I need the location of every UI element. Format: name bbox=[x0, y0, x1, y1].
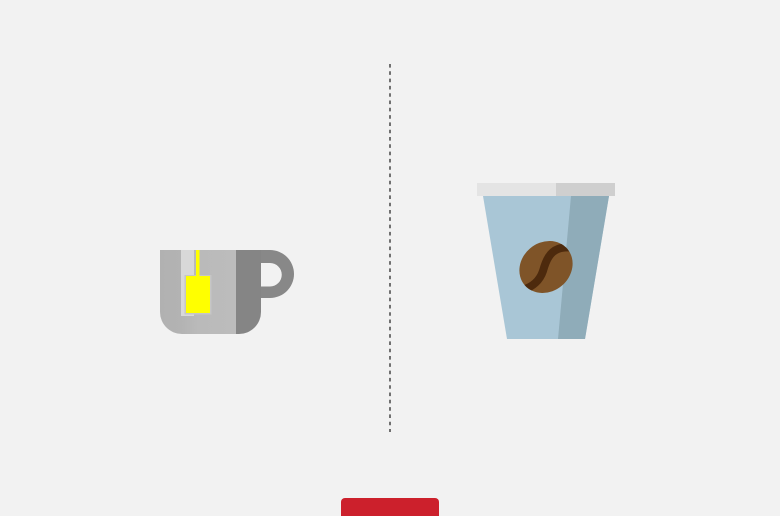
tea bag light band bbox=[181, 250, 194, 316]
divider: dashed line bbox=[389, 64, 391, 432]
cup shaded side bbox=[558, 196, 609, 339]
coffee bean bbox=[519, 241, 573, 293]
cup body bbox=[483, 196, 609, 339]
mug shaded side bbox=[236, 250, 261, 334]
tea bag string bbox=[196, 250, 200, 277]
cup lid right bbox=[556, 183, 615, 196]
red button bbox=[341, 498, 439, 516]
bean body bbox=[509, 230, 583, 304]
tea bag halo bbox=[184, 275, 212, 314]
icon: coffee cup bbox=[477, 183, 615, 339]
mug handle bbox=[240, 250, 294, 298]
mug body bbox=[160, 250, 236, 334]
cup lid left bbox=[477, 183, 556, 196]
bean crease bbox=[522, 247, 575, 290]
icon: tea mug bbox=[160, 250, 294, 334]
tea bag tag bbox=[186, 276, 210, 313]
